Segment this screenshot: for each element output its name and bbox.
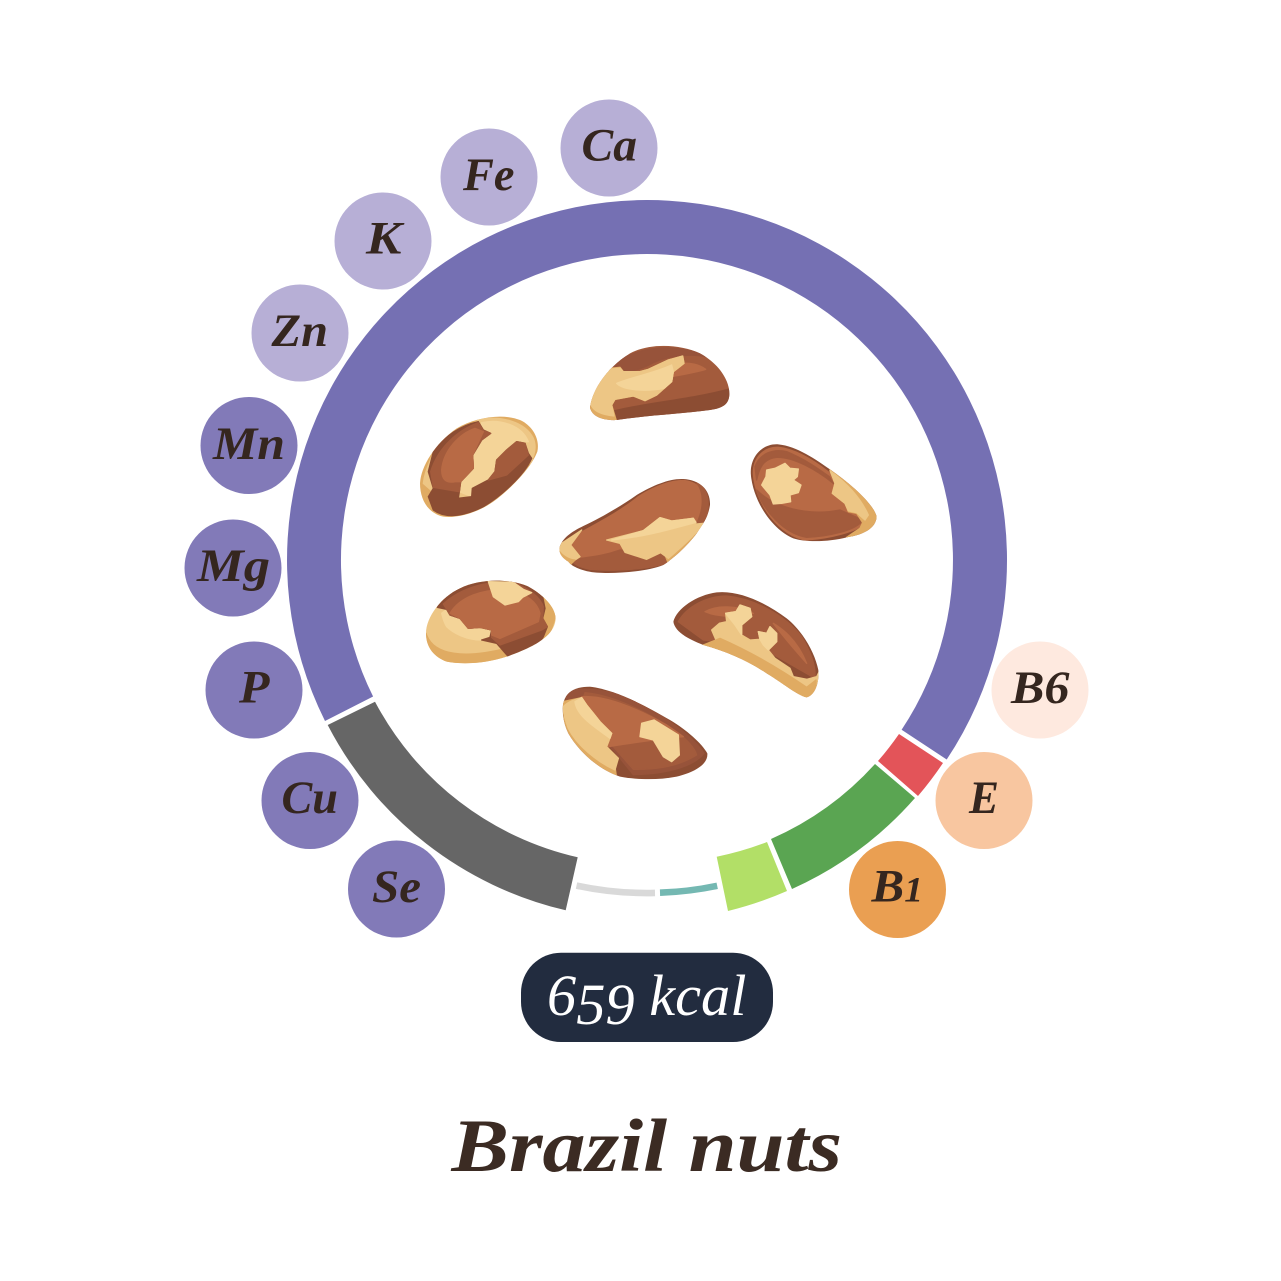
mineral badge: Se: Se xyxy=(372,861,421,913)
mineral badge: Ca xyxy=(560,100,658,196)
calorie pill: 6 xyxy=(547,963,576,1028)
mineral badge: Mn xyxy=(200,397,298,494)
mineral badge: Fe xyxy=(440,128,538,226)
nut: top xyxy=(590,346,730,420)
ring segment: red xyxy=(878,734,943,796)
mineral badge: P xyxy=(206,642,302,738)
nut: right xyxy=(750,444,877,542)
vitamin badge: B1: B1 xyxy=(870,861,923,913)
calorie pill xyxy=(521,953,773,1042)
mineral badge: Cu xyxy=(262,752,358,849)
mineral badge: Mg xyxy=(184,520,282,616)
calorie pill: 59 xyxy=(576,972,635,1037)
vitamin badge: B6 xyxy=(992,642,1088,738)
mineral badge: Mn: Mn xyxy=(212,418,285,470)
nut: centre xyxy=(557,477,713,577)
mineral badge: K: K xyxy=(365,212,404,264)
mineral badge: Se xyxy=(348,840,445,938)
vitamin badge: E: E xyxy=(968,772,999,824)
ring segment: light green xyxy=(717,842,787,911)
ring segment: minerals (purple) xyxy=(287,200,1007,760)
calorie pill: kcal xyxy=(635,963,746,1028)
title: Brazil nuts xyxy=(450,1105,842,1188)
nut: lower left xyxy=(426,580,556,664)
vitamin badge: E xyxy=(936,752,1032,849)
vitamin badge: B6: B6 xyxy=(1010,662,1070,714)
mineral badge: Mg: Mg xyxy=(196,540,270,592)
nut: curved right xyxy=(673,592,818,698)
nut: upper left xyxy=(420,416,538,517)
mineral badge: Zn xyxy=(252,284,348,382)
nut: bottom xyxy=(562,686,708,780)
mineral badge: P: P xyxy=(238,662,271,714)
mineral badge: K xyxy=(334,192,432,290)
mineral badge: Zn: Zn xyxy=(270,305,328,357)
mineral badge: Ca: Ca xyxy=(582,120,637,172)
ring segment: grey xyxy=(328,702,578,910)
mineral badge: Cu: Cu xyxy=(282,772,338,824)
nutrient ring xyxy=(287,200,1007,911)
ring segment: green xyxy=(771,764,915,889)
mineral badge: Fe: Fe xyxy=(462,149,514,201)
ring segment: thin light grey xyxy=(576,886,655,893)
vitamin badge: B1 xyxy=(849,841,946,938)
ring segment: thin teal xyxy=(660,886,717,893)
